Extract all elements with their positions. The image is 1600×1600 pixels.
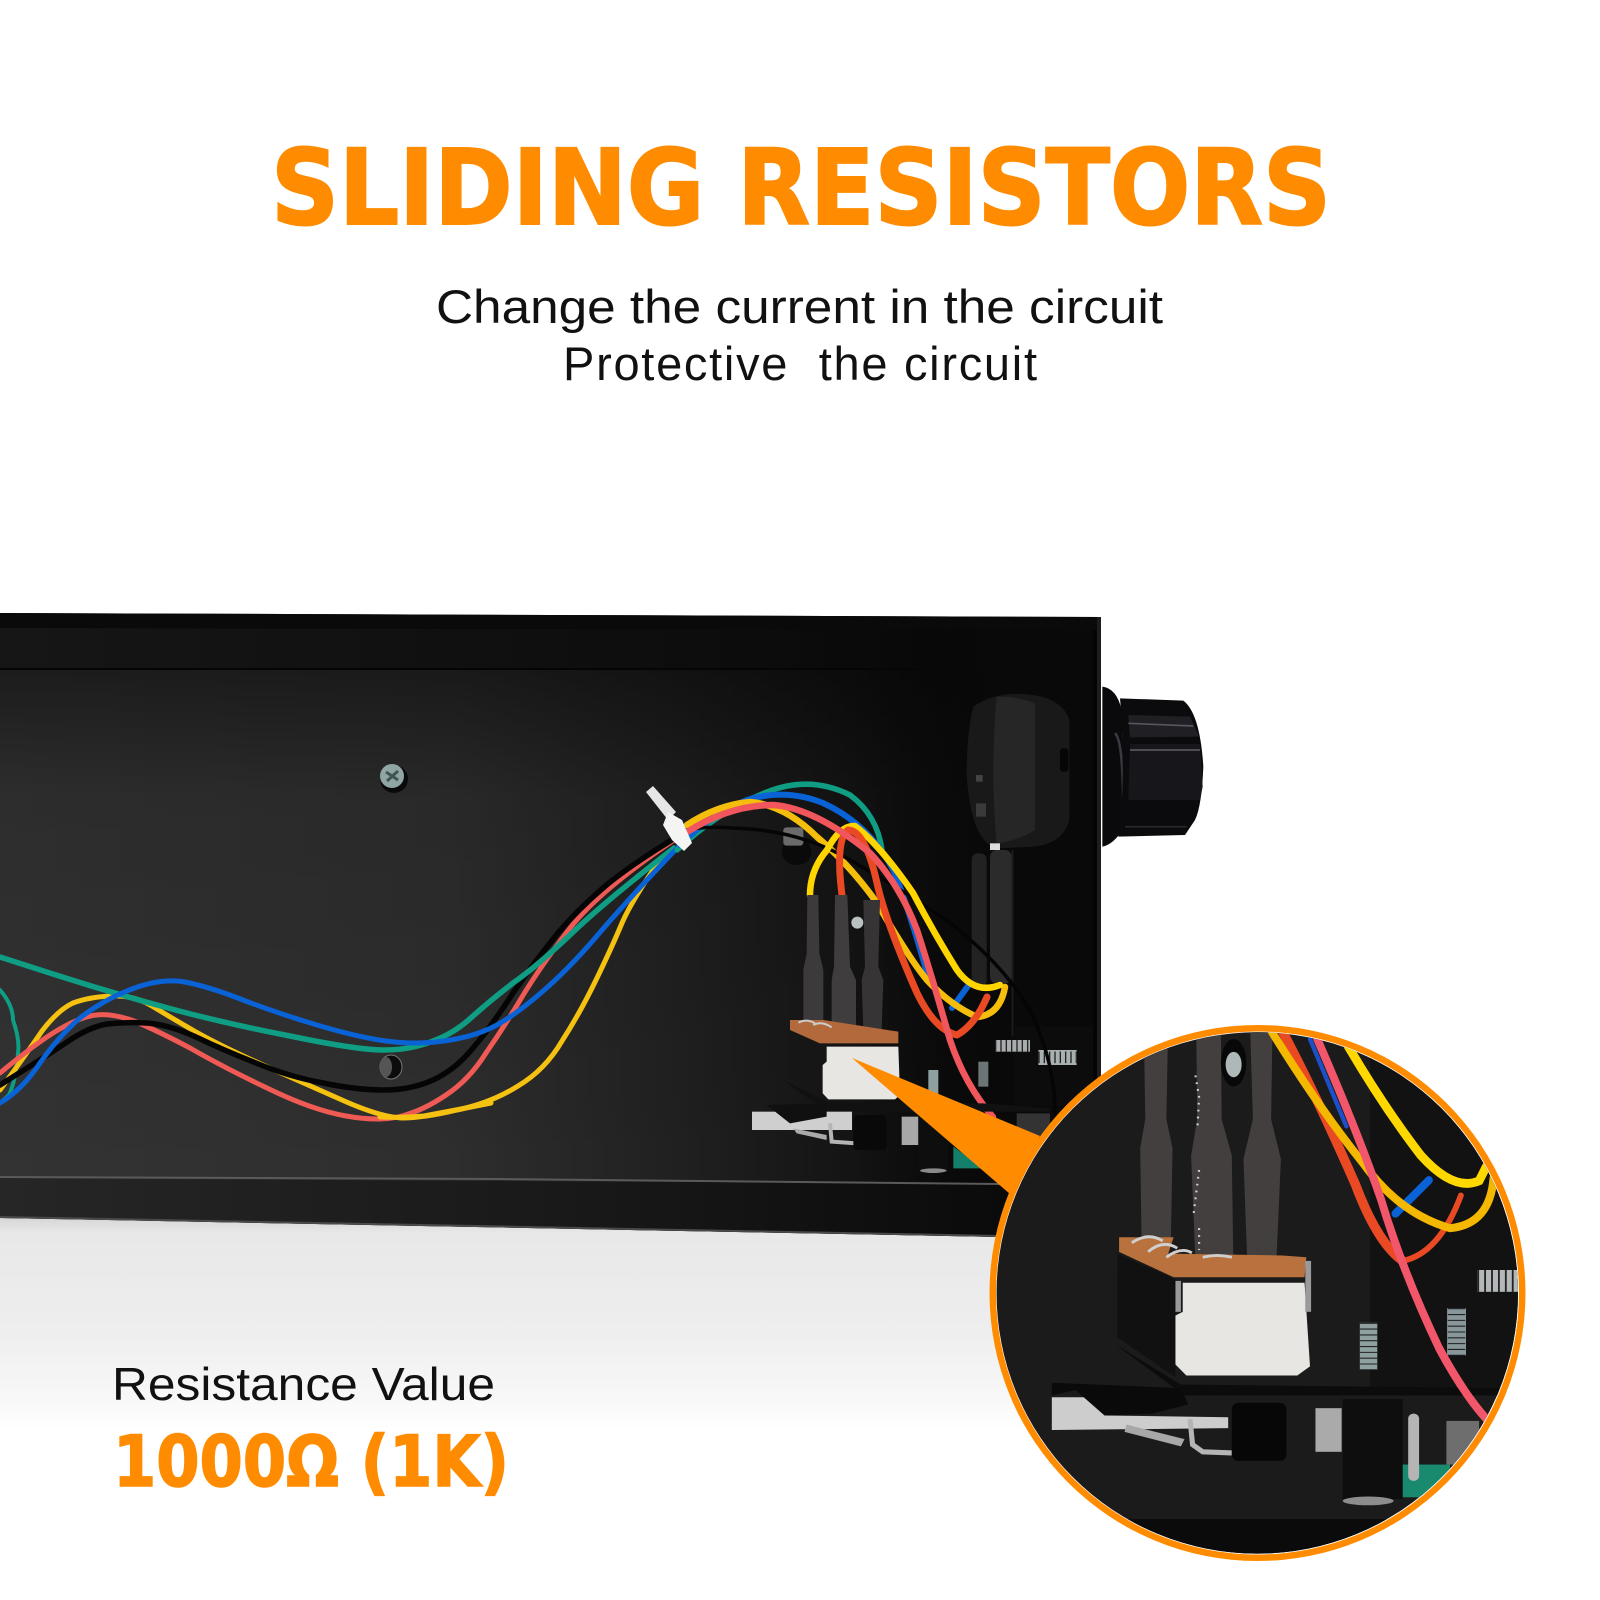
subtitle bbox=[436, 280, 1163, 390]
rear screw bbox=[1221, 1039, 1246, 1086]
wire: short green loop bbox=[0, 990, 18, 1103]
wire: orange-red from sleeve bbox=[840, 830, 987, 1035]
wiring harness bbox=[0, 784, 1055, 1119]
icon: control knob bbox=[1102, 687, 1203, 847]
wire: yellow from sleeve bbox=[810, 826, 1000, 988]
potentiometer inside the box bbox=[967, 694, 1069, 848]
wire: blue bbox=[0, 845, 680, 1103]
sliding resistor on the main view bbox=[752, 895, 1050, 1173]
mounting hole bbox=[380, 1055, 402, 1079]
wire: blue upper arc bbox=[680, 795, 927, 973]
wire: yellow overlap near low point bbox=[380, 1103, 491, 1117]
threaded studs bbox=[1360, 1270, 1521, 1370]
wire: green upper arc bbox=[677, 784, 882, 850]
heat-shrink sleeves bbox=[1140, 1025, 1281, 1261]
wire: red bbox=[0, 840, 674, 1119]
value: 1000 ohm: 1000Ω (1K) bbox=[113, 1421, 509, 1503]
floor shadow bbox=[0, 1216, 1100, 1430]
wire: blue lower stub bbox=[952, 986, 968, 1008]
wire: black bbox=[0, 835, 680, 1090]
rear wire sleeves and bracket bbox=[782, 827, 1093, 1107]
icon: panel screw bbox=[380, 764, 408, 793]
specks on middle sleeve bbox=[1194, 1075, 1199, 1250]
green board and lug bbox=[1403, 1465, 1450, 1497]
title: SLIDING RESISTORS bbox=[271, 127, 1331, 249]
lever and bracket bbox=[1052, 1397, 1228, 1430]
mounting plate bbox=[1115, 1345, 1505, 1395]
wire: yellow bbox=[0, 860, 660, 1118]
subtitle: Protective the circuit bbox=[563, 337, 1037, 390]
panel: black metal enclosure bbox=[0, 613, 1552, 1592]
wire: yellow upper long bbox=[687, 802, 1005, 1017]
callout pointer bbox=[852, 1058, 1040, 1194]
callout: magnified resistor inset bbox=[990, 1025, 1526, 1561]
wire: green bbox=[0, 848, 674, 1050]
inset wires bbox=[1272, 1032, 1494, 1421]
label: resistance value: Resistance Value bbox=[112, 1358, 495, 1410]
icon: cable tie bbox=[646, 786, 692, 851]
wire: black thin run bbox=[680, 827, 1055, 1113]
standoff post bbox=[1343, 1399, 1403, 1499]
wire: salmon main bbox=[687, 805, 993, 1117]
subtitle: Change the current in the circuit bbox=[436, 280, 1163, 333]
resistor body bbox=[1117, 1254, 1175, 1377]
